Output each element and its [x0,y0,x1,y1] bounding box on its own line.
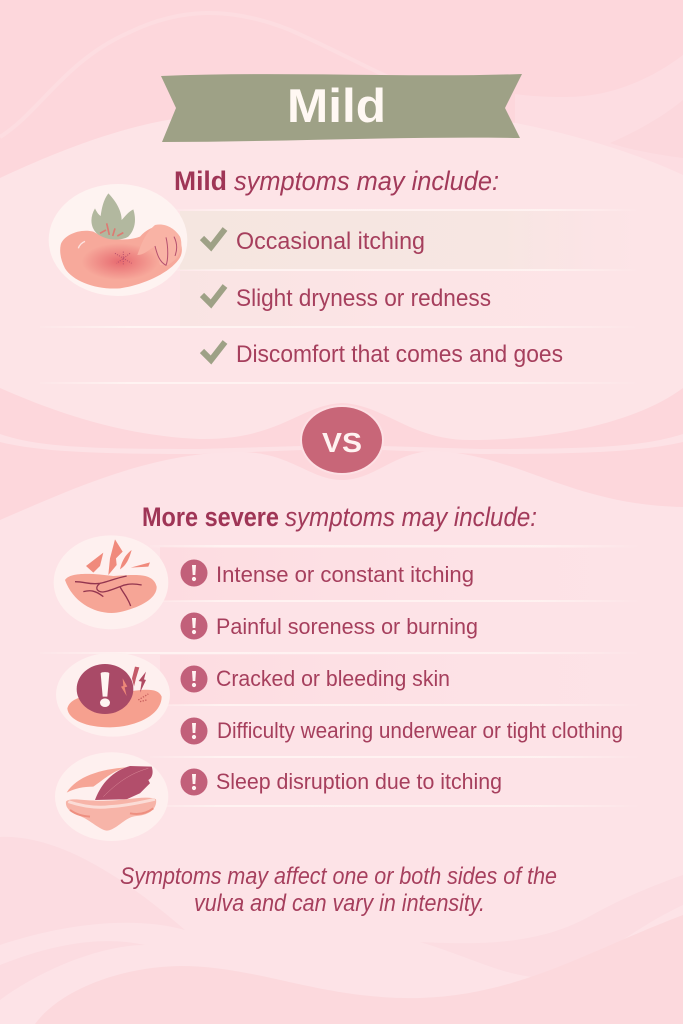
heading: mild symptoms: symptoms may include: [234,166,499,196]
row: sleep disruption: Sleep disruption due to itching [216,769,502,794]
row: occasional itching: Occasional itching [236,228,425,255]
row: discomfort: Discomfort that comes and goes [236,341,563,368]
panel: severe symptom list [40,545,640,807]
row: cracked skin: Cracked or bleeding skin [216,666,450,691]
vs badge [300,405,384,475]
icon: alert [180,718,208,744]
footer note: vulva and can vary in intensity. [194,890,485,917]
heading: mild symptoms: Mild [174,166,227,196]
banner: Mild [161,74,522,142]
heading: severe symptoms: symptoms may include: [285,502,537,532]
icon: feather and pillow [55,752,168,841]
row: difficulty wearing underwear: Difficulty wearing underwear or tight clothing [217,718,623,743]
icon: irritated skin with flame and hand [49,184,187,296]
row: slight dryness: Slight dryness or redness [236,285,491,312]
icon: check [202,229,225,247]
vs badge: VS [322,427,362,458]
footer note: Symptoms may affect one or both sides of the [120,863,557,890]
row: intense itching: Intense or constant itching [216,562,474,587]
row: painful soreness: Painful soreness or burning [216,614,478,639]
banner title: Mild [287,79,386,132]
icon: alert [180,560,208,586]
icon: check [202,286,225,304]
icon: alert [180,768,208,796]
icon: alert over sore skin [56,653,170,737]
icon: alert [180,612,208,640]
panel: mild symptom list [40,209,640,384]
heading: severe symptoms: More severe [142,502,279,532]
icon: cracked skin with shards [54,535,168,629]
icon: check [202,342,225,360]
footer note [120,863,557,917]
icon: alert [180,666,208,692]
heading: severe symptoms [142,502,537,532]
